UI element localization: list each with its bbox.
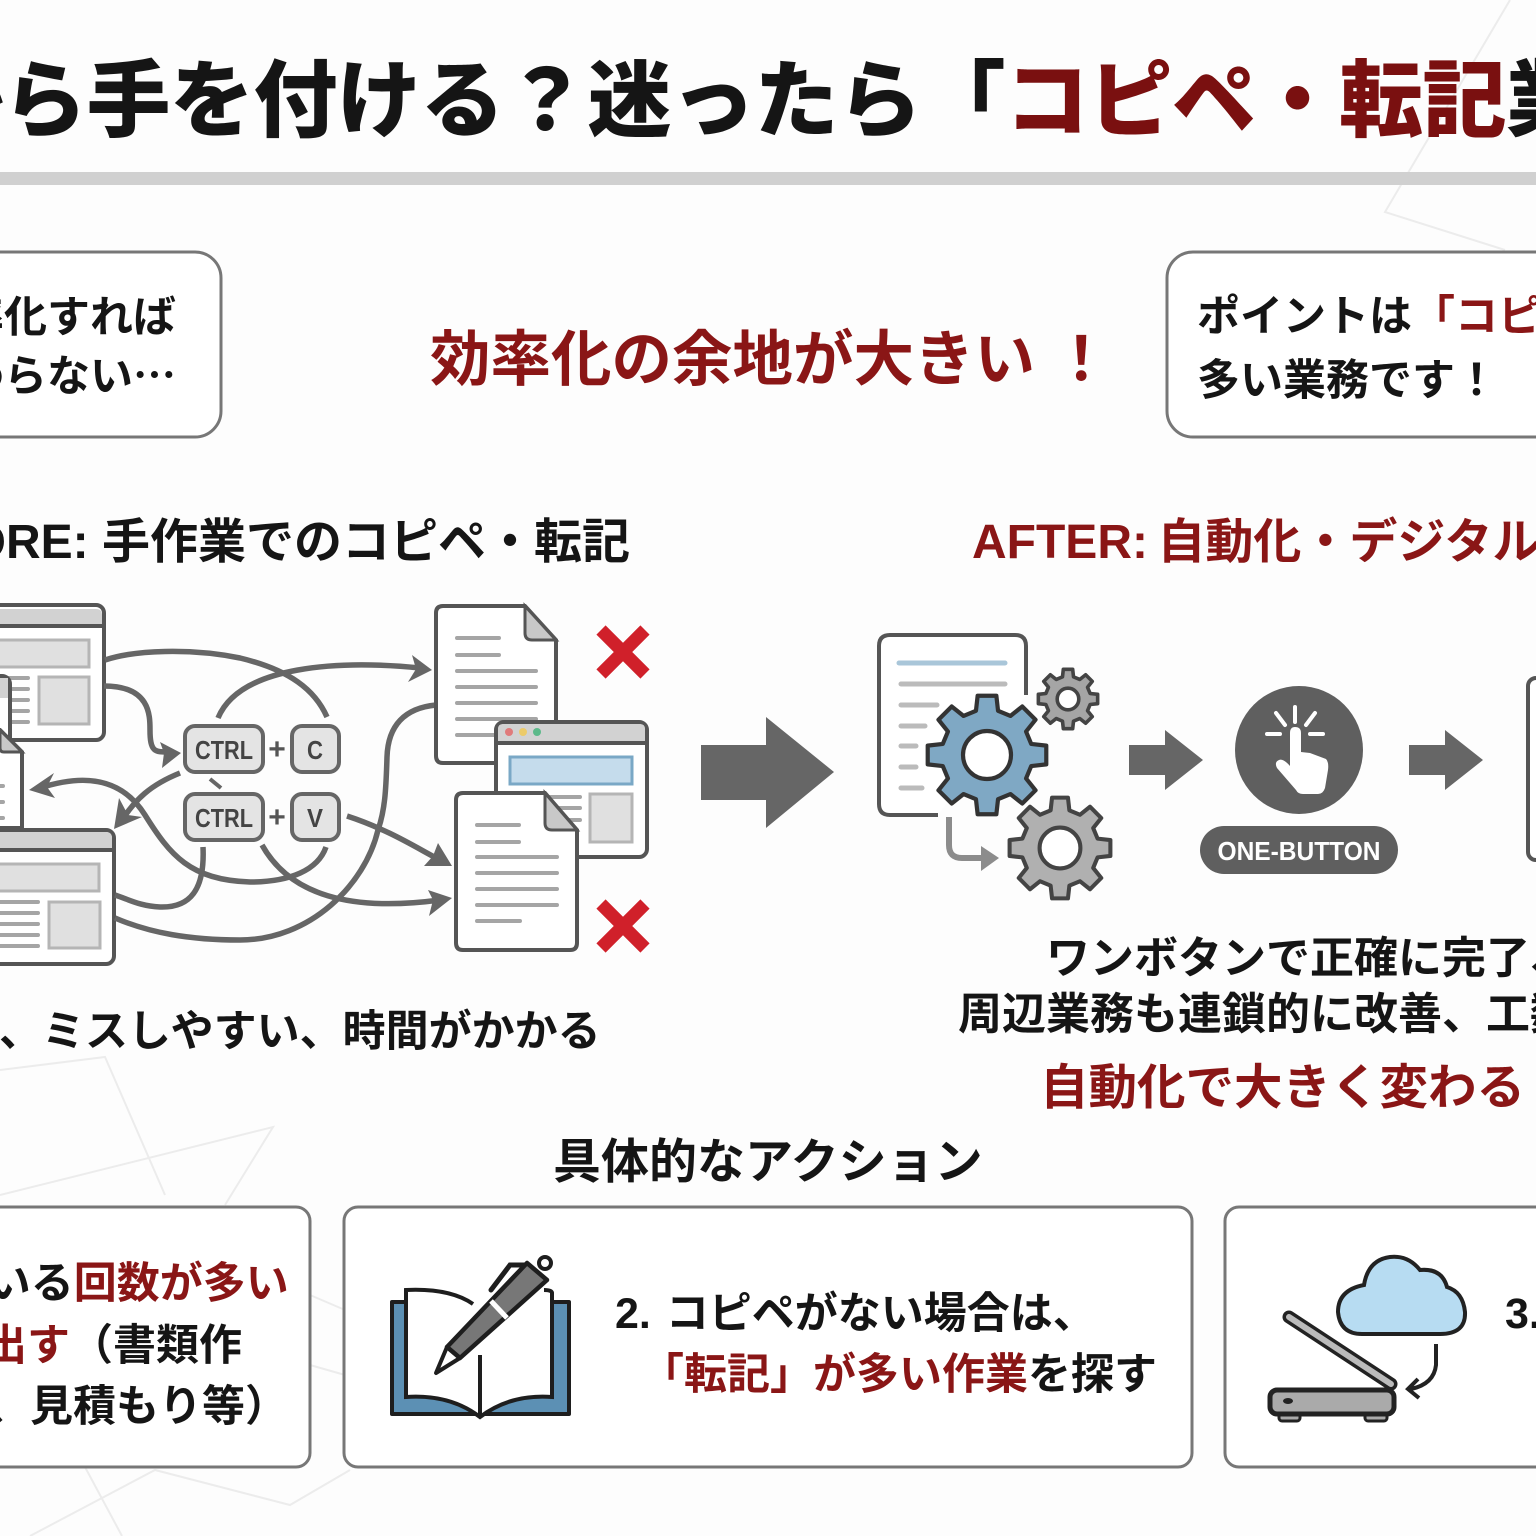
text: after benefits bbox=[958, 934, 1536, 1039]
icon: document top right bbox=[436, 606, 556, 763]
keys: ctrl plus c: CTRL bbox=[195, 735, 253, 765]
keys: ctrl plus c bbox=[185, 726, 339, 772]
panel: right speech box bbox=[1167, 252, 1536, 437]
keys: ctrl plus c: C bbox=[307, 735, 323, 765]
diagram: tangled manual copy and paste bbox=[0, 605, 647, 964]
icon: left document bbox=[0, 730, 22, 828]
icon: cloud and scanner bbox=[1270, 1257, 1465, 1421]
heading: concrete actions: 具体的なアクション bbox=[553, 1136, 983, 1189]
icon: document bottom right bbox=[456, 793, 577, 950]
label: one-button pill bbox=[1200, 826, 1398, 874]
panel: action 3 bbox=[1225, 1207, 1536, 1467]
icon: one button hand bbox=[1235, 686, 1363, 814]
panel: action 2: 2. コピペがない場合は、 bbox=[615, 1290, 1096, 1338]
keys: ctrl plus v: + bbox=[268, 801, 286, 834]
arrow: to button bbox=[1129, 730, 1203, 790]
keys: ctrl plus v bbox=[185, 794, 339, 840]
icon: open book and pen bbox=[392, 1257, 569, 1417]
icon: result document bbox=[1528, 678, 1536, 860]
arrow: before to after bbox=[701, 717, 834, 828]
label: one-button pill: ONE-BUTTON bbox=[1218, 836, 1380, 866]
keys: ctrl plus v: CTRL bbox=[195, 803, 253, 833]
arrow: to result bbox=[1409, 730, 1483, 790]
keys: ctrl plus v: V bbox=[307, 803, 324, 833]
panel: action 2: 「転記」が多い作業を探す bbox=[641, 1351, 1157, 1399]
panel: left speech box bbox=[0, 252, 221, 437]
panel: right speech box: 多い業務です！ bbox=[1197, 357, 1498, 405]
arrows: tangled connections bbox=[29, 651, 452, 940]
icon: browser window top left bbox=[0, 605, 104, 740]
panel: action 2 bbox=[344, 1207, 1192, 1467]
icon: browser window right bbox=[496, 722, 647, 857]
icon: browser window bottom left bbox=[0, 830, 114, 964]
heading: room for efficiency: 効率化の余地が大きい ！ bbox=[430, 325, 1112, 393]
icon: small window behind bbox=[0, 676, 10, 776]
icon: red cross top bbox=[601, 630, 645, 674]
keys: ctrl plus c: + bbox=[268, 733, 286, 766]
icon: document with gears bbox=[879, 635, 1110, 898]
icon: red cross bottom bbox=[601, 904, 645, 948]
panel: action 1 bbox=[0, 1207, 310, 1467]
